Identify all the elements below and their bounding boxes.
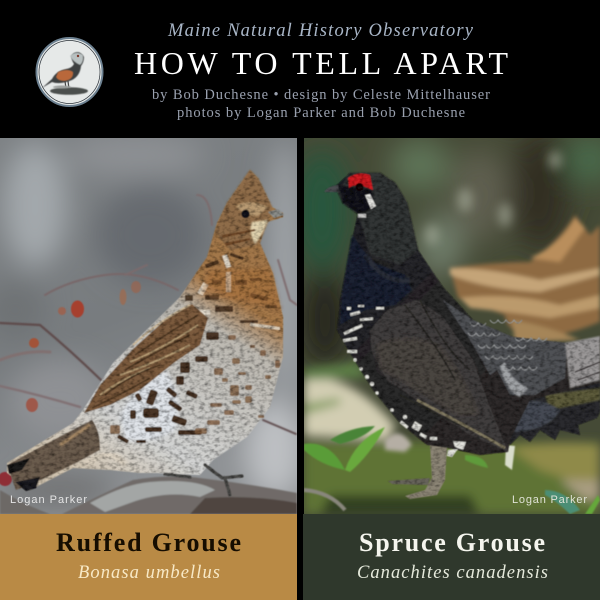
fern leaves	[304, 426, 600, 514]
scientific name: Bonasa umbellus	[78, 563, 220, 583]
photo credit: Logan Parker	[512, 494, 587, 506]
organisation name: Maine Natural History Observatory	[167, 21, 474, 41]
neck and breast mottling	[185, 229, 277, 323]
pale rock and stem	[505, 445, 515, 470]
flank white blob	[120, 370, 178, 441]
eye	[241, 210, 250, 218]
blue-black breast	[340, 235, 412, 325]
bird: spruce grouse	[324, 173, 600, 499]
perch branch	[0, 476, 297, 514]
rust chest band	[200, 268, 281, 310]
body	[324, 173, 600, 455]
scientific name: Canachites canadensis	[357, 563, 548, 583]
white breast spots	[343, 305, 466, 457]
belly feather scallops	[110, 335, 280, 434]
crest and head	[215, 170, 272, 250]
header text block	[134, 21, 508, 121]
pale ground blur	[304, 362, 600, 514]
panel: spruce grouse photo	[294, 130, 600, 514]
pale tail	[565, 336, 600, 388]
stump roots	[450, 215, 600, 342]
bird: ruffed grouse	[7, 170, 284, 495]
undertail spikes	[509, 382, 600, 446]
eye	[356, 183, 364, 191]
wing	[84, 304, 208, 413]
head and neck	[338, 173, 418, 265]
byline: by Bob Duchesne • design by Celeste Mittelhauser	[152, 87, 490, 103]
common name: Spruce Grouse	[359, 528, 545, 557]
body	[7, 170, 283, 490]
forest background blur	[294, 130, 600, 368]
bill	[268, 209, 284, 218]
fallen stick	[304, 490, 345, 510]
photo credit: Logan Parker	[10, 494, 87, 506]
common name: Ruffed Grouse	[56, 528, 241, 557]
berries	[0, 281, 141, 486]
photo credit line: photos by Logan Parker and Bob Duchesne	[177, 105, 465, 121]
bill	[324, 185, 339, 192]
white cheek mark	[365, 194, 376, 209]
light dapples	[425, 151, 562, 245]
header band	[0, 0, 600, 138]
title: HOW TO TELL APART	[134, 45, 508, 81]
lower tail	[7, 420, 100, 490]
red comb	[348, 174, 373, 190]
leg and foot	[405, 445, 447, 499]
background blur	[0, 135, 305, 508]
panel: ruffed grouse photo	[0, 135, 305, 514]
feet	[165, 465, 242, 495]
panel: spruce grouse name	[303, 514, 600, 600]
panel: ruffed grouse name	[0, 514, 297, 600]
flank dark bars	[117, 332, 219, 444]
wing	[370, 300, 508, 452]
logo: duck in oval badge	[36, 38, 102, 106]
bare branches with red berries	[0, 195, 297, 434]
scalloped rump	[443, 300, 567, 395]
